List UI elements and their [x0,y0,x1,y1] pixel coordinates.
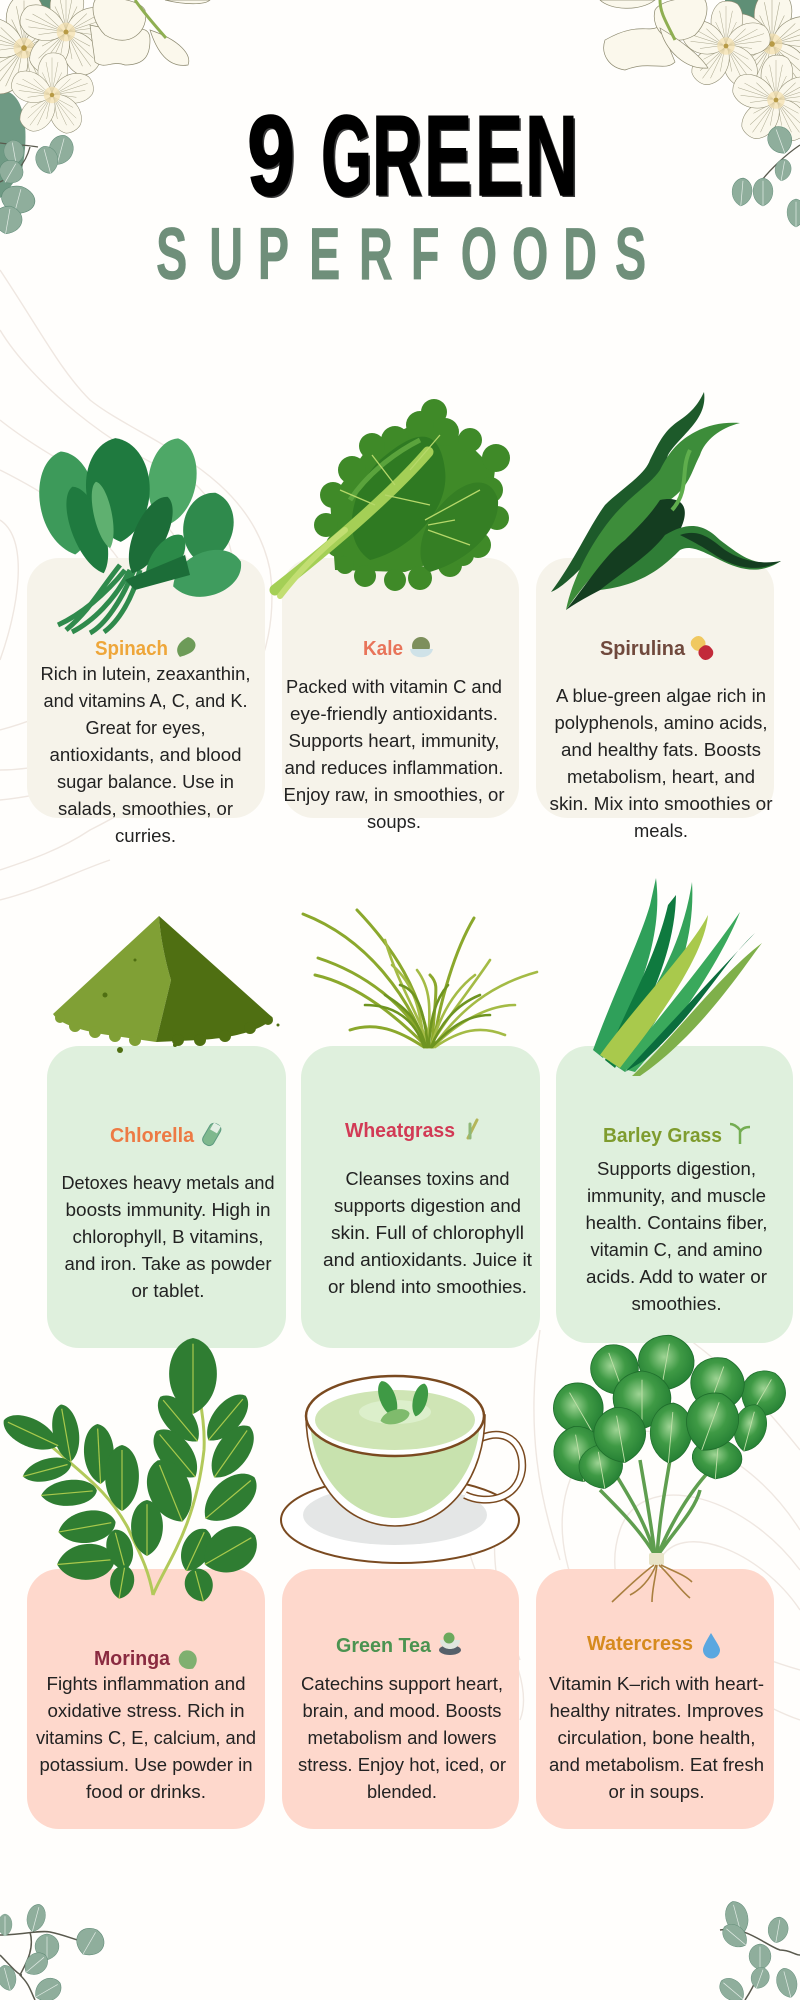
text: spinach: antioxidants, and blood [50,744,242,765]
text: spinach: curries. [115,825,176,846]
card: wheatgrass [301,910,540,1348]
subtitle: P [258,213,289,294]
text: wheatgrass: and antioxidants. Juice it [323,1249,532,1270]
card: watercress [536,1331,794,1829]
text: kale: and reduces inflammation. [284,757,504,778]
card: chlorella [47,916,286,1348]
text: barley grass: acids. Add to water or [586,1266,767,1287]
flowers: top-right corner [600,0,800,146]
card: green tea [281,1376,522,1829]
text: spirulina: and healthy fats. Boosts [561,739,761,760]
text: watercress: or in soups. [608,1781,704,1802]
text: chlorella: Detoxes heavy metals and [62,1172,274,1193]
heading: chlorella: Chlorella [110,1124,195,1147]
text: watercress [549,1673,764,1802]
text: moringa [36,1673,256,1802]
text: kale [284,676,504,832]
subtitle: F [411,213,439,294]
icon: pill [688,634,716,662]
icon: matcha [439,1632,461,1655]
illustration: spirulina [551,392,781,610]
subtitle: O [461,213,497,294]
title: G [323,95,374,222]
heading: barley grass: Barley Grass [603,1124,722,1147]
text: wheatgrass [323,1168,532,1297]
text: barley grass: vitamin C, and amino [590,1239,762,1260]
illustration: kale [275,399,510,596]
flowers: top-left corner [0,0,210,198]
illustration: watercress [544,1331,794,1602]
text: barley grass: health. Contains fiber, [586,1212,768,1233]
heading: spirulina: Spirulina [600,637,686,660]
card: spinach [27,435,265,846]
title: R [372,93,422,220]
text: green tea: Catechins support heart, [301,1673,503,1694]
text: spinach [40,663,250,846]
icon: leafy green [177,637,196,657]
illustration: green tea cup [281,1376,522,1563]
subtitle: U [209,213,243,294]
title: E [424,93,472,220]
text: spirulina: skin. Mix into smoothies or [550,793,772,814]
text: green tea: metabolism and lowers [308,1727,496,1748]
eucalyptus sprig: upper right [731,123,800,227]
card: kale [275,399,519,832]
text: spinach: Great for eyes, [86,717,206,738]
heading: kale: Kale [363,637,403,660]
heading: wheatgrass: Wheatgrass [345,1119,455,1142]
heading: moringa: Moringa [94,1647,171,1670]
illustration: barley grass [593,878,762,1076]
text: kale: Packed with vitamin C and [286,676,502,697]
illustration: spinach [33,435,248,633]
title: E [475,93,523,220]
text: moringa: potassium. Use powder in [40,1754,252,1775]
eucalyptus sprig: upper left [0,132,76,236]
text: watercress: and metabolism. Eat fresh [549,1754,764,1775]
text: wheatgrass: supports digestion and [334,1195,521,1216]
title: E [477,95,525,222]
text: green tea: stress. Enjoy hot, iced, or [298,1754,506,1775]
subtitle [156,213,646,294]
eucalyptus sprig: bottom left [0,1902,109,2000]
text: spirulina: A blue-green algae rich in [556,685,766,706]
text: spinach: and vitamins A, C, and K. [44,690,248,711]
text: green tea: blended. [367,1781,437,1802]
text: kale: Supports heart, immunity, [288,730,500,751]
subtitle: D [563,213,597,294]
text: watercress: circulation, bone health, [558,1727,756,1748]
illustration: moringa [0,1338,266,1605]
text: green tea [298,1673,506,1802]
text: spirulina: polyphenols, amino acids, [554,712,768,733]
text: chlorella: and iron. Take as powder [64,1253,272,1274]
text: barley grass [586,1158,768,1314]
eucalyptus sprig: bottom right [715,1899,800,2000]
text: chlorella: or tablet. [132,1280,204,1301]
text: moringa: Fights inflammation and [46,1673,245,1694]
subtitle: O [512,213,548,294]
icon: sheaf of rice [468,1120,477,1138]
title: G [321,93,372,220]
heading: spinach: Spinach [95,637,168,660]
text: chlorella: boosts immunity. High in [66,1199,270,1220]
subtitle: E [309,213,340,294]
icon: water drop [703,1633,720,1658]
subtitle: R [359,213,393,294]
card: moringa [0,1338,266,1829]
text: wheatgrass: or blend into smoothies. [328,1276,527,1297]
icon: seedling [730,1124,750,1144]
subtitle: S [615,213,646,294]
title: E [426,95,474,222]
text: chlorella [62,1172,274,1301]
icon: test tube [201,1121,223,1147]
text: moringa: oxidative stress. Rich in [48,1700,244,1721]
heading: watercress: Watercress [587,1632,693,1655]
title: R [374,95,424,222]
text: barley grass: immunity, and muscle [587,1185,766,1206]
title [247,93,580,222]
heading: green tea: Green Tea [336,1634,432,1657]
text: wheatgrass: skin. Full of chlorophyll [331,1222,524,1243]
text: barley grass: Supports digestion, [597,1158,756,1179]
text: green tea: brain, and mood. Boosts [302,1700,502,1721]
text: kale: soups. [367,811,421,832]
text: chlorella: chlorophyll, B vitamins, [72,1226,264,1247]
card: barley grass [556,878,793,1343]
text: moringa: food or drinks. [86,1781,206,1802]
text: spinach: Rich in lutein, zeaxanthin, [40,663,250,684]
text: watercress: Vitamin K–rich with heart- [549,1673,764,1694]
illustration: wheatgrass [303,910,537,1047]
text: moringa: vitamins C, E, calcium, and [36,1727,256,1748]
icon: herb [175,1647,201,1673]
icon: salad bowl [410,637,433,657]
text: kale: Enjoy raw, in smoothies, or [284,784,504,805]
card: spirulina [536,392,781,841]
text: kale: eye-friendly antioxidants. [290,703,498,724]
text: watercress: healthy nitrates. Improves [550,1700,764,1721]
text: spinach: salads, smoothies, or [58,798,233,819]
text: spirulina [550,685,772,841]
title: 9 [247,93,295,220]
illustration: chlorella powder pile [53,916,280,1053]
text: spirulina: meals. [634,820,688,841]
text: spirulina: metabolism, heart, and [567,766,755,787]
text: spinach: sugar balance. Use in [57,771,234,792]
text: barley grass: smoothies. [632,1293,722,1314]
subtitle: S [156,213,187,294]
title: N [525,93,578,220]
title: N [527,95,580,222]
title: 9 [249,95,297,222]
text: wheatgrass: Cleanses toxins and [346,1168,510,1189]
